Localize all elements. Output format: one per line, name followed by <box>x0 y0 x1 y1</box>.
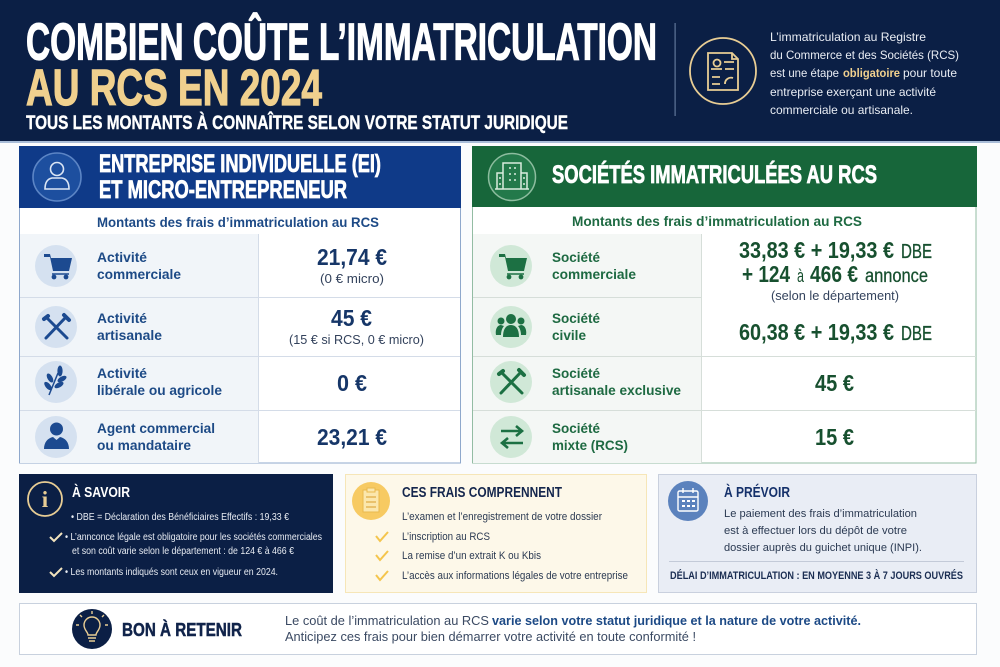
list: L’examen et l’enregistrement de votre dossier <box>402 511 602 523</box>
list: L’accès aux informations légales de votre entreprise <box>402 570 628 582</box>
icon: building <box>488 154 536 200</box>
row: activité commerciale: 21,74 € <box>317 244 387 270</box>
heading: CES FRAIS COMPRENNENT <box>402 485 562 501</box>
list: L’inscription au RCS <box>402 531 490 543</box>
row: société mixte <box>490 416 854 458</box>
row: société civile: DBE <box>901 323 932 345</box>
title: COMBIEN COÛTE L’IMMATRICULATION <box>26 12 657 72</box>
body text: est à effectuer lors du dépôt de votre <box>724 525 907 537</box>
row: société mixte: 15 € <box>815 424 854 450</box>
panel heading: ENTREPRISE INDIVIDUELLE (EI) <box>99 150 381 178</box>
icon: clipboard <box>352 482 390 520</box>
row: société civile: civile <box>552 327 586 343</box>
row: société commerciale: commerciale <box>552 266 636 282</box>
intro text: est une étape <box>770 66 839 80</box>
subtitle: TOUS LES MONTANTS À CONNAÎTRE SELON VOTRE STATUT JURIDIQUE <box>26 110 568 134</box>
row: société commerciale: (selon le département) <box>771 288 899 303</box>
row: société artisanale exclusive: Société <box>552 365 600 381</box>
callout: à savoir <box>19 474 333 593</box>
row: société commerciale: 33,83 € + 19,33 € <box>739 237 894 263</box>
header banner <box>0 0 1000 143</box>
intro text: L’immatriculation au Registre <box>770 30 926 44</box>
row: société artisanale exclusive <box>490 361 854 403</box>
icon: info: i <box>42 487 49 512</box>
icon: person <box>33 153 81 201</box>
icon: document <box>690 38 756 104</box>
intro text: obligatoire <box>843 66 900 80</box>
callout: à prévoir <box>658 474 976 592</box>
row: société artisanale exclusive: 45 € <box>815 370 854 396</box>
row: agent commercial: ou mandataire <box>97 437 191 453</box>
row: activité libérale ou agricole: Activité <box>97 365 147 381</box>
row: société civile <box>490 306 932 348</box>
icon: calendar <box>668 481 708 521</box>
body text: dossier auprès du guichet unique (INPI). <box>724 542 922 554</box>
row: agent commercial: Agent commercial <box>97 420 215 436</box>
notes: • L’annconce légale est obligatoire pour les sociétés commerciales <box>65 532 322 543</box>
row: activité artisanale: artisanale <box>97 327 162 343</box>
notes <box>50 512 322 578</box>
row: société civile: 60,38 € + 19,33 € <box>739 319 894 345</box>
intro text: commerciale ou artisanale. <box>770 103 913 117</box>
heading: À PRÉVOIR <box>724 484 790 501</box>
row: activité artisanale: (15 € si RCS, 0 € micro) <box>289 332 424 347</box>
row: société mixte: mixte (RCS) <box>552 437 628 453</box>
row: activité artisanale <box>35 305 424 348</box>
row: société commerciale: à <box>797 266 805 286</box>
panel heading: ET MICRO-ENTREPRENEUR <box>99 176 347 204</box>
row: société mixte: Société <box>552 420 600 436</box>
list <box>376 511 628 582</box>
row: société commerciale: 466 € <box>810 261 858 287</box>
intro text <box>770 30 959 117</box>
panel heading <box>99 150 381 204</box>
column heading: Montants des frais d’immatriculation au RCS <box>97 214 379 230</box>
row: activité commerciale <box>35 244 387 287</box>
body text <box>724 508 922 554</box>
panel: entreprise individuelle <box>19 146 461 463</box>
row: société civile: Société <box>552 310 600 326</box>
callout: ces frais comprennent <box>346 474 646 592</box>
icon: light bulb <box>72 609 112 649</box>
row: société commerciale: DBE <box>901 241 932 263</box>
panel heading: SOCIÉTÉS IMMATRICULÉES AU RCS <box>552 160 877 189</box>
title: AU RCS EN 2024 <box>26 59 322 116</box>
row: société artisanale exclusive: artisanale exclusive <box>552 382 681 398</box>
panel: sociétés immatriculées <box>472 146 977 463</box>
row: activité libérale ou agricole: libérale ou agricole <box>97 382 222 398</box>
body text: Le paiement des frais d’immatriculation <box>724 508 917 520</box>
row: société commerciale: + 124 <box>742 261 790 287</box>
takeaway text: Le coût de l’immatriculation au RCS <box>285 614 489 628</box>
heading: À SAVOIR <box>72 484 130 501</box>
intro text: pour toute <box>903 66 957 80</box>
row: activité commerciale: commerciale <box>97 266 181 282</box>
row: agent commercial <box>35 416 387 458</box>
takeaway text <box>285 614 861 644</box>
row: activité libérale ou agricole <box>35 361 367 403</box>
takeaway text: varie selon votre statut juridique et la nature de votre activité. <box>492 614 861 628</box>
row: agent commercial: 23,21 € <box>317 424 387 450</box>
icon: info <box>28 482 62 516</box>
takeaway text: Anticipez ces frais pour bien démarrer votre activité en toute conformité ! <box>285 630 696 644</box>
notes: • Les montants indiqués sont ceux en vigueur en 2024. <box>65 567 278 578</box>
heading: BON À RETENIR <box>122 619 242 640</box>
row: activité artisanale: Activité <box>97 310 147 326</box>
list: La remise d’un extrait K ou Kbis <box>402 550 541 562</box>
notes: • DBE = Déclaration des Bénéficiaires Effectifs : 19,33 € <box>71 512 289 523</box>
title <box>26 12 657 116</box>
row: activité libérale ou agricole: 0 € <box>337 370 367 396</box>
row: activité artisanale: 45 € <box>331 305 372 331</box>
column heading: Montants des frais d’immatriculation au RCS <box>572 213 862 229</box>
row: société commerciale: Société <box>552 249 600 265</box>
row: société commerciale: annonce <box>865 266 928 287</box>
intro text: entreprise exerçant une activité <box>770 85 936 99</box>
callout: bon à retenir <box>20 604 976 654</box>
row: activité commerciale: (0 € micro) <box>320 271 384 286</box>
row: activité commerciale: Activité <box>97 249 147 265</box>
notes: et son coût varie selon le département : de 124 € à 466 € <box>72 546 294 557</box>
intro text: du Commerce et des Sociétés (RCS) <box>770 48 959 62</box>
row: société commerciale <box>490 237 932 303</box>
